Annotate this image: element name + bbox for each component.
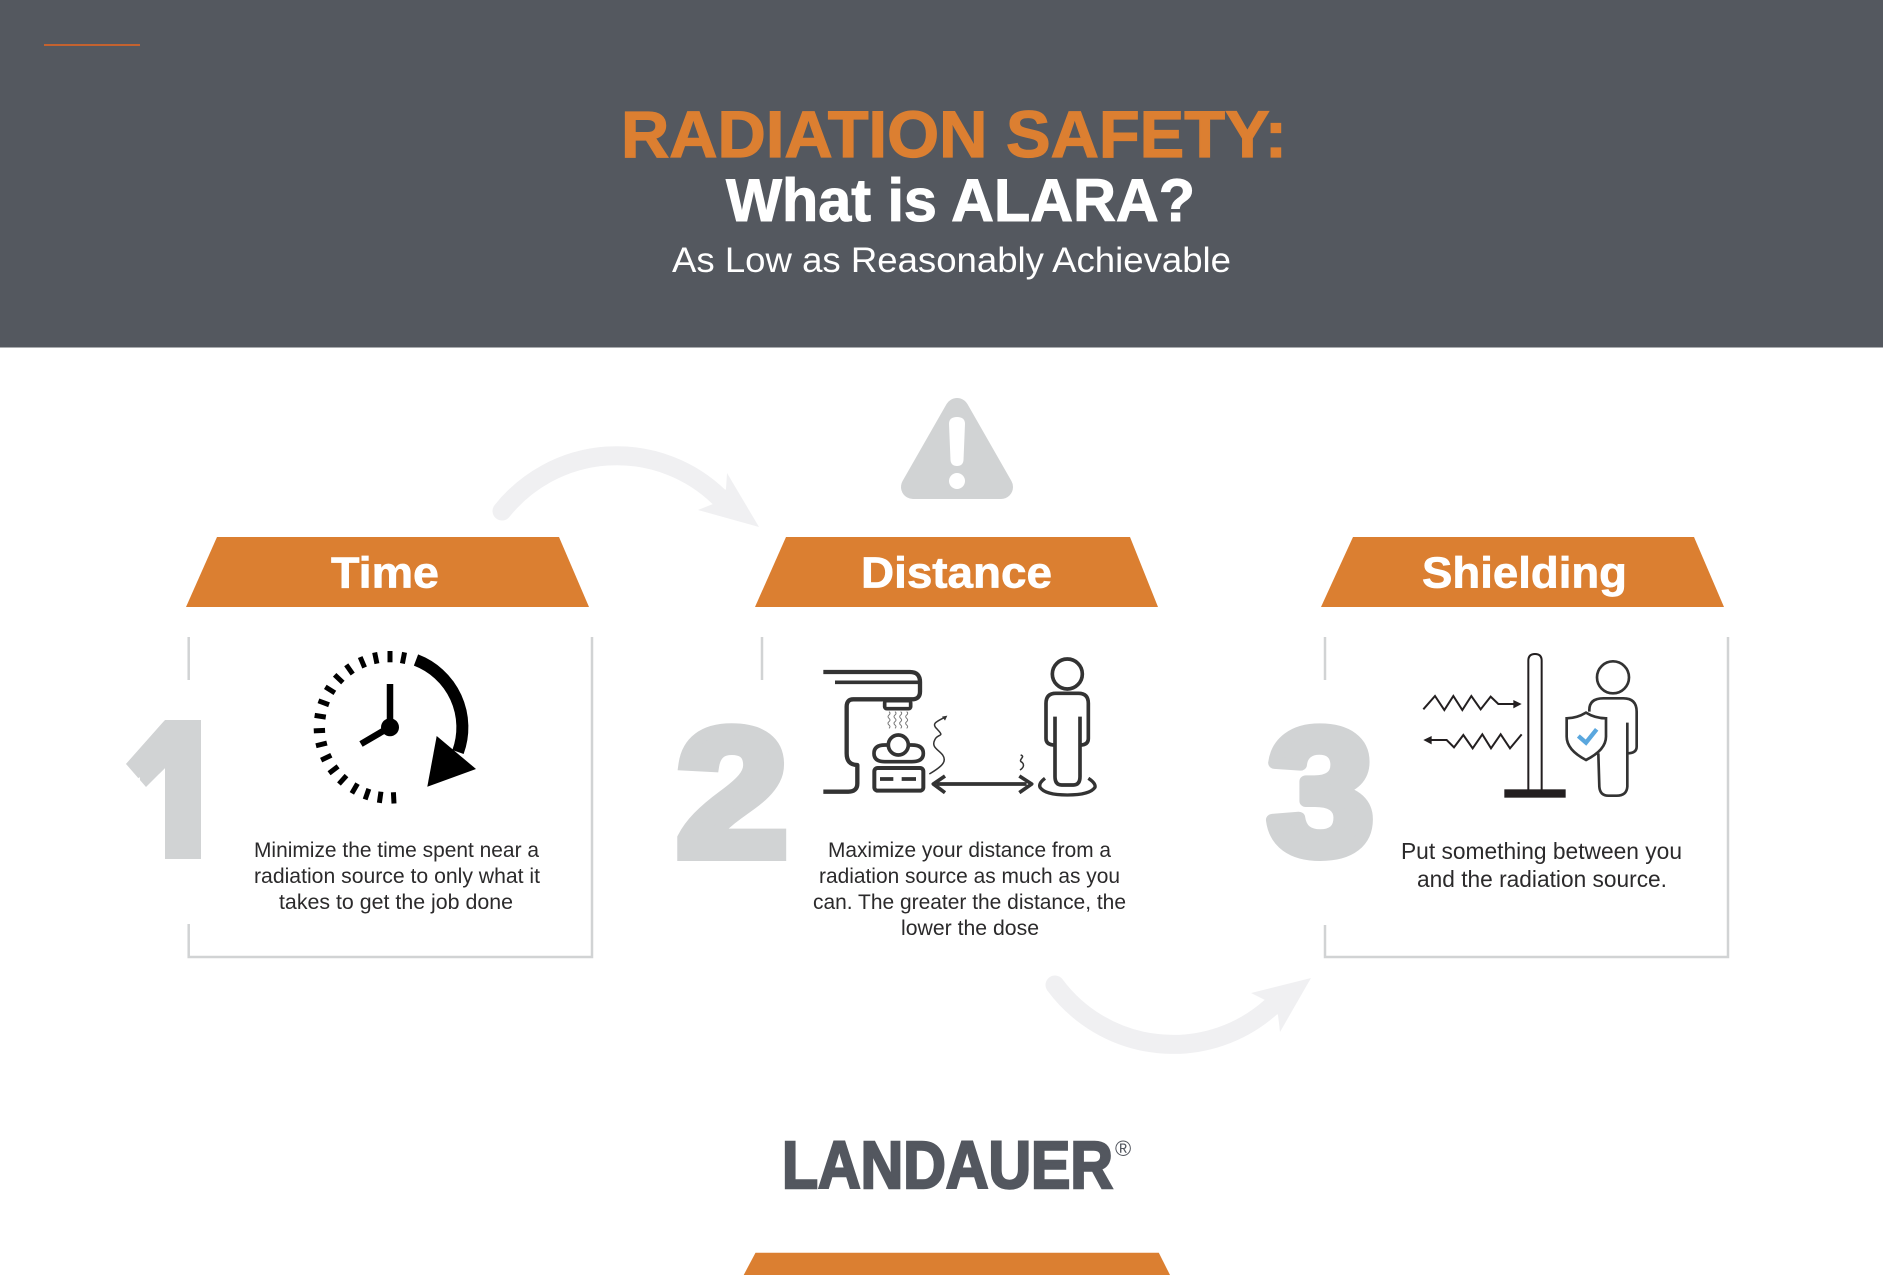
number 1: 1 [109,679,229,902]
banner: time: Time [331,548,439,598]
text: distance description: can. The greater the distance, the [813,891,1126,914]
text: shielding description: Put something between you [1401,838,1682,864]
icon: x-ray machine and distant person [823,659,1095,795]
icon: warning triangle [913,410,1001,489]
icon: clock with arrow [314,651,476,803]
subtitle: As Low as Reasonably Achievable [672,241,1231,280]
icon: barrier and shielded person [1423,654,1637,798]
bottom orange banner [744,1253,1170,1275]
number 2: 2 [677,693,788,894]
text: distance description: radiation source as much as you [819,865,1120,888]
panel: time [109,537,592,957]
text: time description: Minimize the time spent near a [254,839,539,862]
panel: distance [677,537,1158,940]
title: what is alara: What is ALARA? [726,167,1195,234]
banner: shielding [1321,537,1724,607]
text: distance description: lower the dose [901,917,1039,940]
text: distance description: Maximize your distance from a [828,839,1111,862]
text: time description [254,839,540,914]
title: radiation safety: RADIATION SAFETY: [621,97,1287,171]
arrow: distance to shielding [1055,978,1311,1044]
banner: time [186,537,589,607]
banner: distance: Distance [861,548,1052,598]
logo: landauer: ® [1115,1136,1131,1161]
banner: distance [755,537,1158,607]
box frame: time [189,637,592,957]
banner: shielding: Shielding [1422,548,1627,598]
box frame: shielding [1325,637,1728,957]
header band [0,0,1883,348]
number 3: 3 [1268,693,1373,891]
logo: landauer: LANDAUER [782,1128,1113,1203]
text: time description: radiation source to only what it [254,865,540,888]
text: time description: takes to get the job done [279,891,513,914]
panel: shielding [1268,537,1728,957]
text: distance description [813,839,1126,940]
text: shielding description: and the radiation source. [1417,866,1667,892]
box stub: distance [761,637,763,680]
arrow: time to distance [502,456,759,527]
text: shielding description [1401,838,1682,892]
